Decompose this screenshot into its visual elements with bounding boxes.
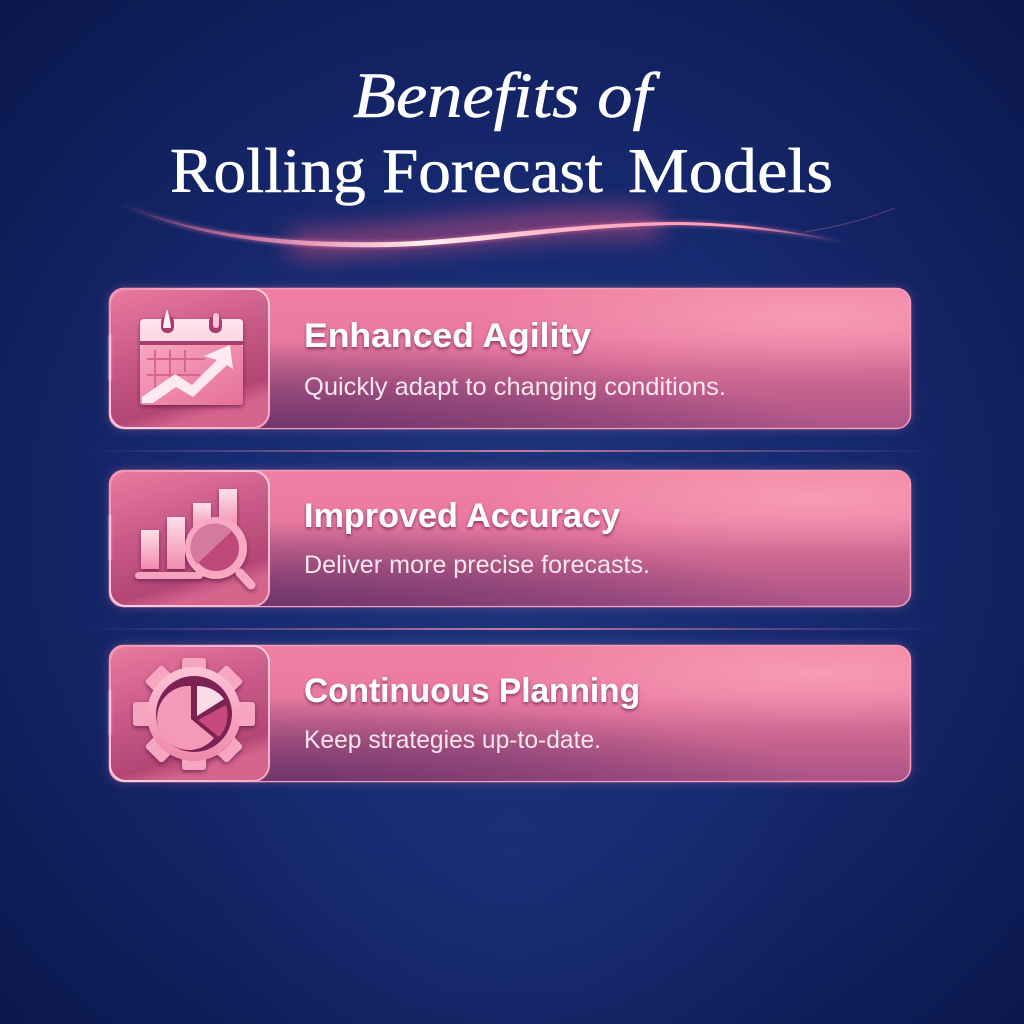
heading: Improved Accuracy — [304, 497, 620, 535]
icon: gear with pie chart — [133, 658, 255, 770]
icon tile: calendar — [109, 289, 269, 428]
panel: improved accuracy — [109, 470, 911, 607]
panel: continuous planning — [109, 645, 911, 782]
icon tile: gear — [109, 646, 269, 781]
heading: Enhanced Agility — [304, 317, 591, 355]
icon: bar chart with magnifier — [135, 489, 251, 585]
panel: enhanced agility — [109, 288, 911, 429]
description: Keep strategies up-to-date. — [304, 726, 601, 754]
title — [170, 60, 833, 206]
heading: Continuous Planning — [304, 672, 640, 710]
description: Quickly adapt to changing conditions. — [304, 373, 726, 401]
title: Benefits of — [353, 60, 661, 132]
icon: calendar with rising arrow — [140, 309, 243, 405]
icon tile: magnifier — [109, 471, 269, 606]
divider lines — [90, 450, 934, 630]
description: Deliver more precise forecasts. — [304, 551, 650, 579]
decorative swoosh under title — [118, 202, 895, 247]
title: Models — [628, 135, 833, 206]
title: Rolling Forecast — [170, 135, 603, 206]
